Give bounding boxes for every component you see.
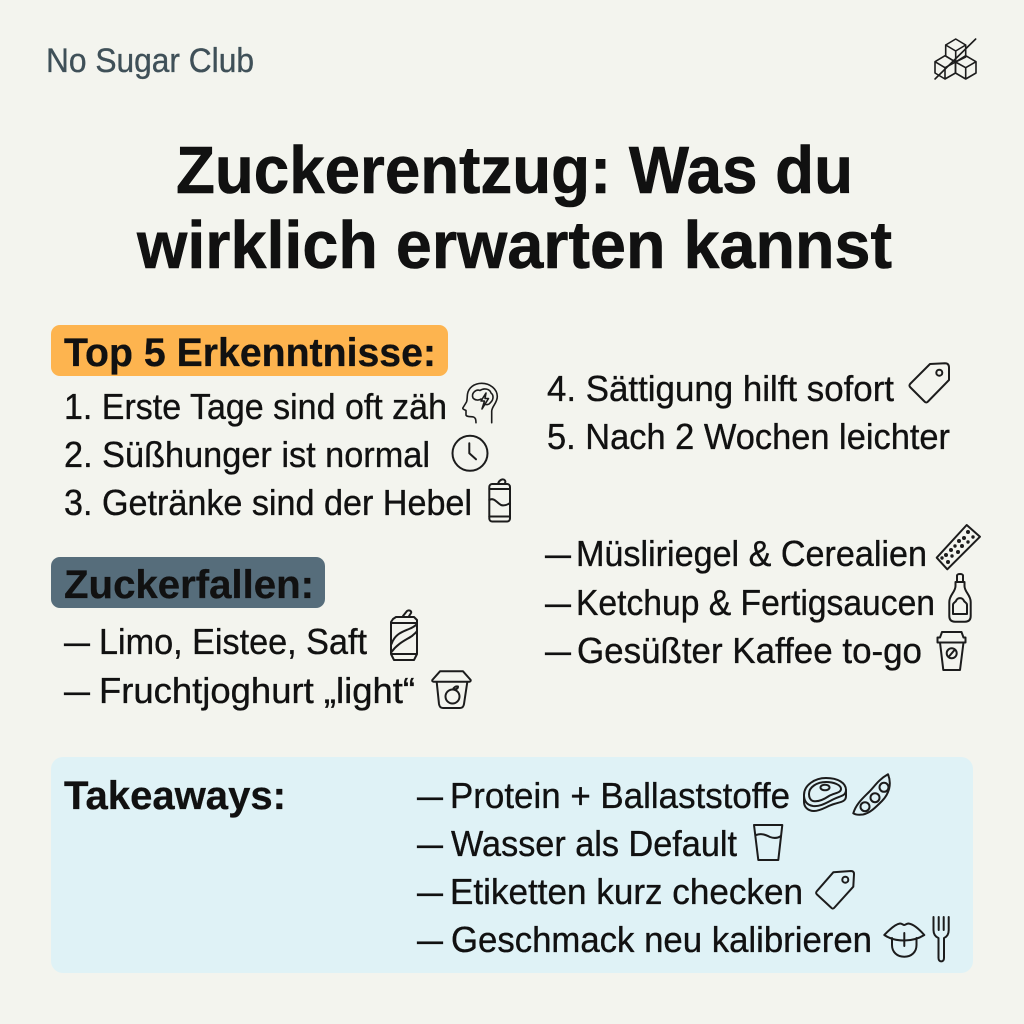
insight 1: 1. Erste Tage sind oft zäh <box>64 386 447 427</box>
takeaway: labels: Etiketten kurz checken <box>450 871 803 912</box>
icon: soda can <box>391 610 417 660</box>
heading: Zuckerfallen: Zuckerfallen: <box>64 563 314 607</box>
title: wirklich erwarten kannst <box>136 208 892 283</box>
title <box>136 133 892 283</box>
takeaway: protein and fibre: Protein + Ballaststoffe <box>450 775 790 816</box>
insight 2: 2. Süßhunger ist normal <box>64 434 430 475</box>
heading: Top 5 Erkenntnisse: Top 5 Erkenntnisse: <box>64 331 436 375</box>
trap: sweetened coffee: Gesüßter Kaffee to-go <box>577 630 922 671</box>
icon: coffee to-go cup <box>938 632 966 670</box>
trap: sweetened coffee: — <box>545 630 571 671</box>
icon: crossed-out sugar cubes <box>935 39 976 79</box>
trap: muesli bars: Müsliriegel & Cerealien <box>576 533 927 574</box>
brand name: No Sugar Club <box>46 42 254 80</box>
icon: ketchup bottle <box>949 574 971 622</box>
trap: soft drinks: Limo, Eistee, Saft <box>99 621 367 662</box>
icon: glass of water <box>754 825 782 860</box>
takeaway: water: Wasser als Default <box>451 823 737 864</box>
icon: muesli bar <box>937 525 980 569</box>
panel: sugar traps <box>51 525 980 711</box>
icon: clock <box>452 436 488 471</box>
title: Zuckerentzug: Was du <box>176 133 853 208</box>
icon: bean pod <box>853 774 890 815</box>
icon: label tag <box>816 871 854 909</box>
trap: ketchup and sauces: — <box>545 582 571 623</box>
trap: fruit yoghurt: — <box>64 670 90 711</box>
panel: takeaways <box>51 757 973 973</box>
icon: tongue and lips <box>884 924 924 957</box>
trap: ketchup and sauces: Ketchup & Fertigsaucen <box>576 582 935 623</box>
insight 4: 4. Sättigung hilft sofort <box>547 368 894 409</box>
icon: price tag <box>909 363 949 402</box>
icon: fork <box>934 917 949 961</box>
takeaway: recalibrate taste: Geschmack neu kalibrieren <box>451 919 872 960</box>
icon: drink can <box>489 479 510 522</box>
insight 3: 3. Getränke sind der Hebel <box>64 482 472 523</box>
trap: fruit yoghurt: Fruchtjoghurt „light“ <box>99 670 415 711</box>
takeaway: labels: — <box>417 871 443 912</box>
insight 5: 5. Nach 2 Wochen leichter <box>547 416 950 457</box>
takeaway: recalibrate taste: — <box>417 919 443 960</box>
icon: head with brain and bolt <box>463 383 497 423</box>
takeaway: water: — <box>417 823 443 864</box>
trap: soft drinks: — <box>64 621 90 662</box>
panel: top 5 insights <box>51 325 950 523</box>
icon: yoghurt cup <box>432 671 471 708</box>
takeaway: protein and fibre: — <box>417 775 443 816</box>
heading: Takeaways: Takeaways: <box>64 774 286 818</box>
icon: steak <box>804 778 846 811</box>
trap: muesli bars: — <box>545 533 571 574</box>
